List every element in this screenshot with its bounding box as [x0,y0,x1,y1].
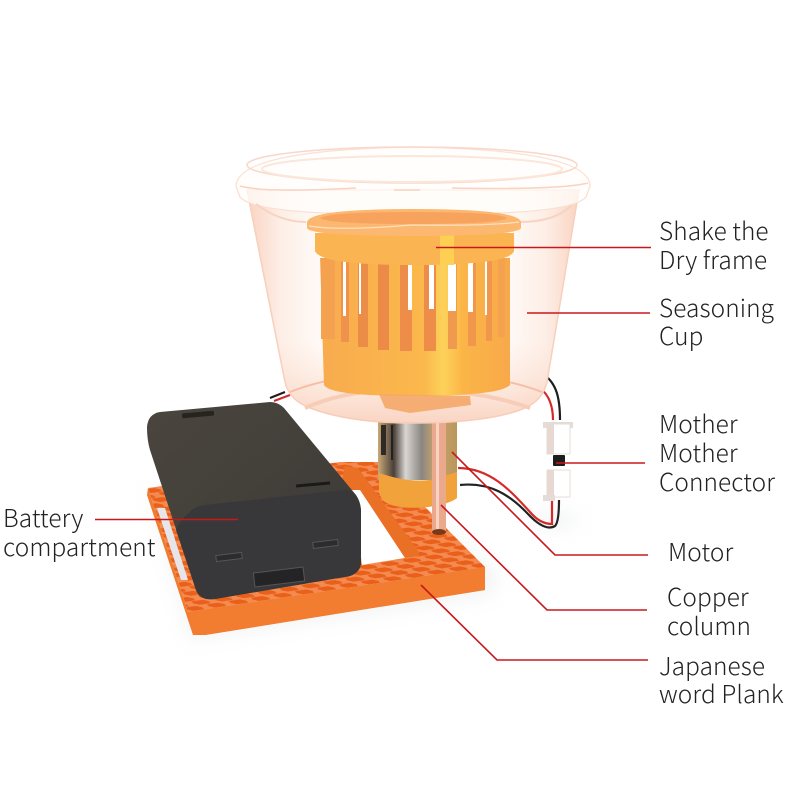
illustration: product [147,147,590,635]
label: copper column: column [667,608,751,643]
label: seasoning cup: Seasoning [659,290,774,325]
label: japanese word plank: Japanese [659,648,765,683]
callout lines [95,248,651,660]
seasoning cup [236,147,590,423]
motor [378,418,457,508]
label: seasoning cup: Cup [659,318,703,353]
label: shake the dry frame: Shake the [659,213,769,248]
copper column [432,418,446,532]
motor mount under cup [379,394,471,413]
label: motor: Motor [668,534,733,569]
battery compartment [147,402,361,599]
mother mother connector [543,422,573,501]
orange base plank [147,462,485,635]
soft floor shadow [150,470,580,640]
label: mother mother connector: Mother [659,406,738,441]
label: mother mother connector: Mother [659,435,738,470]
label: mother mother connector: Connector [659,464,775,499]
label: japanese word plank: word Plank [659,676,784,711]
label: battery compartment: Battery [3,500,83,535]
label: shake the dry frame: Dry frame [659,242,767,277]
shake the dry frame basket [307,209,521,396]
wires from motor to connector [270,378,560,528]
label: copper column: Copper [667,579,749,614]
label: battery compartment: compartment [3,529,156,564]
